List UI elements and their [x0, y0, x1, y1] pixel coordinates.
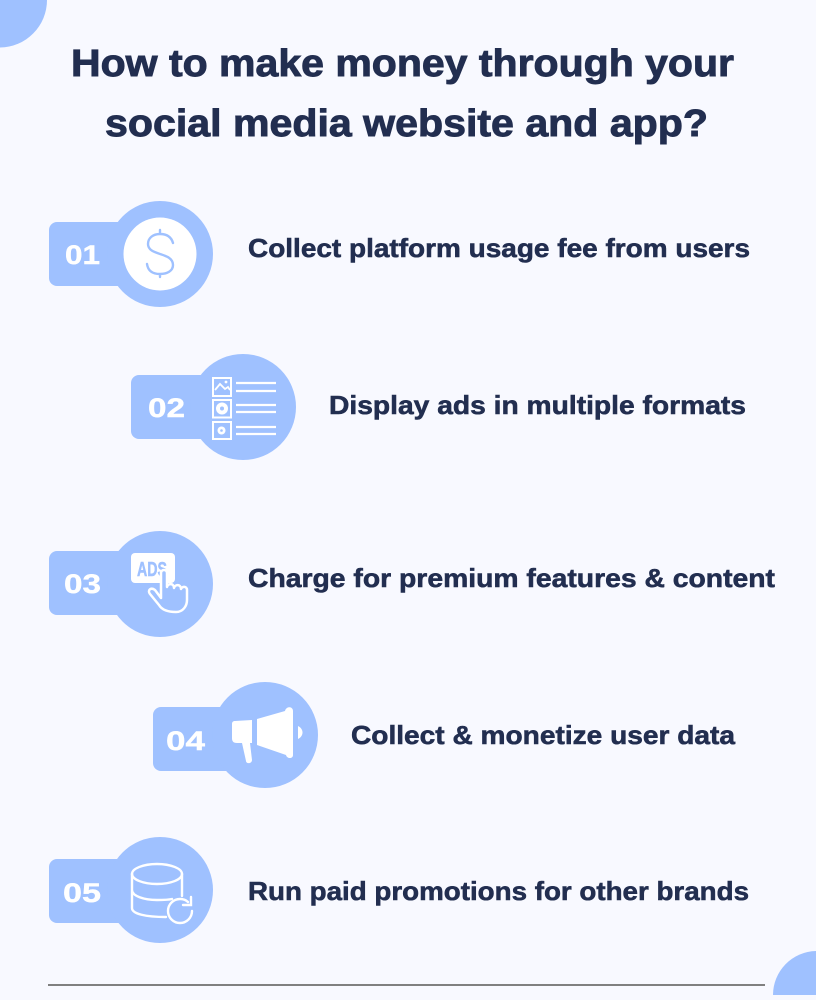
step 03	[49, 531, 213, 637]
icon: ads click hand: ADS	[137, 559, 167, 581]
step 01	[49, 201, 213, 307]
step 04 text: Collect & monetize user data	[351, 720, 736, 750]
title	[71, 43, 734, 145]
title: social media website and app?	[105, 103, 708, 145]
number 02: 02	[148, 393, 185, 423]
footer rule	[48, 984, 765, 986]
badge 03	[49, 531, 213, 637]
step 05	[49, 837, 213, 943]
icon: ad format list	[213, 378, 276, 439]
number 05: 05	[63, 878, 101, 908]
icon: megaphone	[232, 707, 302, 763]
decorative corner: top left	[0, 0, 47, 48]
step 02	[131, 354, 296, 460]
badge 01	[49, 201, 213, 307]
badge 05	[49, 837, 213, 943]
step 03 text: Charge for premium features & content	[248, 563, 775, 593]
step 02 text: Display ads in multiple formats	[329, 390, 746, 420]
step 01 text: Collect platform usage fee from users	[248, 233, 750, 263]
icon: dollar coin	[124, 218, 196, 290]
number 04: 04	[166, 726, 205, 756]
title: How to make money through your	[71, 43, 734, 85]
step 05 text: Run paid promotions for other brands	[248, 876, 749, 906]
number 01: 01	[65, 240, 100, 270]
step 04	[153, 682, 318, 788]
decorative corner: bottom right	[773, 951, 816, 995]
badge 04	[153, 682, 318, 788]
icon: ads click hand	[131, 553, 187, 612]
badge 02	[131, 354, 296, 460]
number 03: 03	[64, 569, 101, 599]
icon: database refresh	[132, 864, 192, 923]
